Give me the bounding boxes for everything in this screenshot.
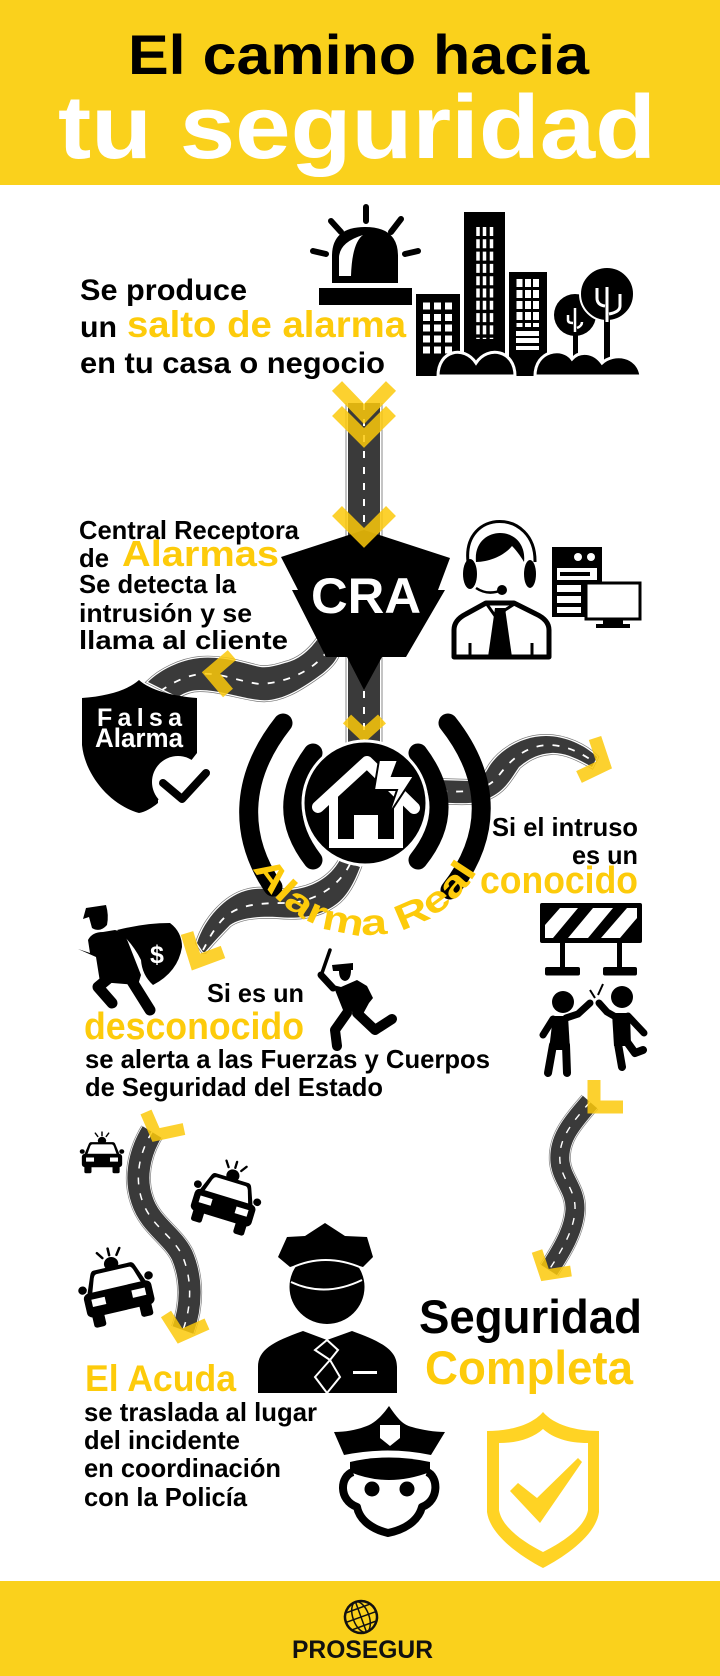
text: el acuda: se traslada al lugar [84,1397,317,1427]
icon: police officer head [334,1406,445,1533]
icon: server and monitor [552,547,640,628]
CRA label: CRA [311,568,421,624]
title line 2: tu seguridad [58,78,656,178]
icon: yellow shield with check [487,1412,599,1568]
text: salto de alarma: salto de alarma [127,304,406,345]
text: seguridad completa: Seguridad [419,1290,642,1343]
road: alarm to CRA and house [346,403,382,750]
icon: barrier [540,903,642,976]
icon: operator with headset [454,522,549,657]
text: desconocido: se alerta a las Fuerzas y Cuerpos [85,1044,490,1074]
text: central receptora: intrusión y se [79,598,252,628]
icon: police officer running [321,950,392,1046]
text: central receptora: Se detecta la [79,569,237,599]
text: central receptora: Alarmas [122,533,279,574]
text: seguridad completa: Completa [425,1341,634,1394]
trees [554,294,596,336]
icon: police car right [183,1152,271,1238]
chevrons on main road [337,386,391,735]
icon: people high five [543,984,644,1073]
text: alarma real on arc: Alarma Real [252,860,476,936]
road: desconocido branch [197,860,360,952]
text: el acuda: con la Policía [84,1482,248,1512]
text: intruso conocido: es un [572,840,638,870]
icon: house under alarm [249,723,481,890]
check mark [163,773,206,799]
text: intruso conocido [480,812,638,902]
chevron: falsa alarma road [211,655,232,693]
title line 1: El camino hacia [128,23,590,86]
icon: police car left [70,1240,162,1330]
text: el acuda: El Acuda [85,1358,236,1399]
chevron: conocido road [579,738,604,777]
bushes [438,352,515,376]
icon: falsa alarma shield: Alarma [95,723,184,753]
text: central receptora: llama al cliente [79,625,288,655]
chevrons: right lower road [537,1080,623,1275]
icon: thief with bag: $ [150,941,164,969]
icon: thief with bag [78,905,182,1010]
text: intruso conocido: Si el intruso [492,812,638,842]
CRA pentagon [281,530,450,690]
text: salto de alarma: Se produce [80,274,247,307]
text: desconocido: desconocido [84,1006,304,1048]
text: el acuda: en coordinación [84,1453,281,1483]
text: seguridad completa [419,1290,642,1394]
prosegur wordmark: PROSEGUR [292,1636,433,1664]
text: central receptora: de [79,543,109,573]
icon: alarm siren [313,207,418,305]
road: conocido branch [435,736,597,803]
road: right lower [549,1102,590,1270]
icon: falsa alarma shield [82,680,215,815]
icon: globe [340,1596,382,1638]
icon: security guard [258,1223,397,1393]
road: CRA to falsa alarma [148,640,338,700]
header band [0,0,720,185]
road: left lower [138,1132,190,1330]
chevron: desconocido road [187,933,223,962]
text: desconocido: Si es un [207,978,304,1008]
icon: city skyline [416,212,641,376]
falsa alarma text: Falsa [97,704,183,732]
text: central receptora: Central Receptora [79,515,300,545]
house [318,762,414,808]
chevrons: left lower road [146,1112,207,1336]
text: salto de alarma: en tu casa o negocio [80,347,385,380]
text: desconocido [84,978,490,1102]
text: intruso conocido: conocido [480,860,638,902]
text: desconocido: de Seguridad del Estado [85,1072,383,1102]
text: el acuda: del incidente [84,1425,240,1455]
text: salto de alarma: un [80,311,117,344]
icon: police car small [80,1132,124,1173]
lightning bolt [374,760,414,816]
signal arcs [249,723,481,890]
footer band [0,1581,720,1676]
text: central receptora [79,515,300,655]
text: el acuda [84,1358,317,1512]
text: salto de alarma [80,274,406,380]
